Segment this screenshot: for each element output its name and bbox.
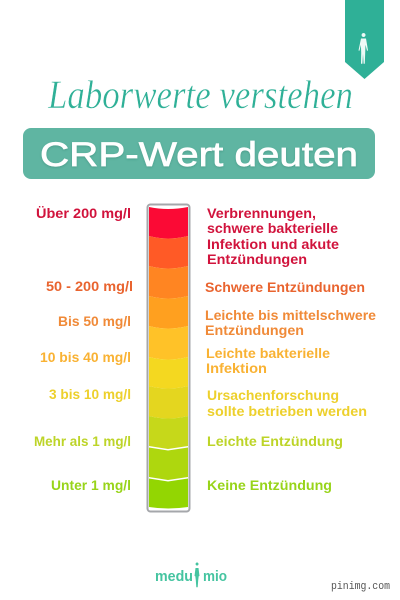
- icon: human body: [359, 33, 368, 64]
- heading banner: CRP-Wert deuten: [40, 136, 358, 174]
- description: mild inflammation: Leichte Entzündung: [207, 433, 343, 449]
- value: 10 to 40: 10 bis 40 mg/l: [40, 349, 131, 365]
- description: severe burns and infection: Entzündungen: [207, 251, 307, 267]
- labels: value ranges: [34, 205, 133, 493]
- icon: logo figure: [194, 563, 200, 587]
- segment: yellow: [149, 357, 188, 388]
- watermark: pinimg.com: [331, 581, 390, 593]
- description: severe burns and infection: schwere bakterielle: [207, 220, 338, 236]
- value: over 1: Mehr als 1 mg/l: [34, 433, 131, 449]
- description: investigate cause: Ursachenforschung: [207, 387, 339, 403]
- description: severe burns and infection: Infektion und akute: [207, 236, 339, 252]
- value: over 200: Über 200 mg/l: [36, 205, 131, 221]
- segment: green: [149, 478, 188, 508]
- value: 3 to 10: 3 bis 10 mg/l: [49, 386, 131, 402]
- logo: medumio: [155, 563, 227, 587]
- logo: medumio: medu: [155, 568, 193, 585]
- value: up to 50: Bis 50 mg/l: [58, 313, 131, 329]
- description: mild to moderate: Leichte bis mittelschwere: [205, 307, 376, 323]
- segment: gold: [149, 326, 188, 360]
- segment: red: [149, 207, 188, 238]
- description: no inflammation: Keine Entzündung: [207, 477, 332, 493]
- description: mild to moderate: [205, 307, 376, 338]
- description: mild bacterial: Infektion: [206, 360, 267, 376]
- description: investigate cause: [207, 387, 367, 419]
- value: under 1: Unter 1 mg/l: [51, 477, 131, 493]
- description: mild bacterial: Leichte bakterielle: [206, 345, 330, 361]
- description: severe burns and infection: [207, 205, 339, 267]
- description: mild to moderate: Entzündungen: [205, 322, 304, 338]
- segment: amber: [149, 296, 188, 328]
- segment: orange: [149, 266, 188, 298]
- heading banner: [23, 128, 375, 179]
- segment: mustard: [149, 386, 188, 418]
- description: severe inflammation: Schwere Entzündungen: [205, 279, 365, 295]
- descriptions: interpretation: [205, 205, 376, 493]
- CRP scale column: [148, 204, 190, 512]
- title: script heading: Laborwerte verstehen: [47, 72, 353, 117]
- bookmark ribbon with body icon: [345, 0, 384, 79]
- logo: medumio: mio: [203, 568, 227, 585]
- description: investigate cause: sollte betrieben werden: [207, 403, 367, 419]
- value: 50 to 200: 50 - 200 mg/l: [46, 278, 133, 294]
- description: severe burns and infection: Verbrennungen,: [207, 205, 316, 221]
- segment: orange-red: [149, 236, 188, 268]
- description: mild bacterial: [206, 345, 330, 376]
- segment: lime: [149, 416, 188, 449]
- segment: light green: [149, 448, 188, 480]
